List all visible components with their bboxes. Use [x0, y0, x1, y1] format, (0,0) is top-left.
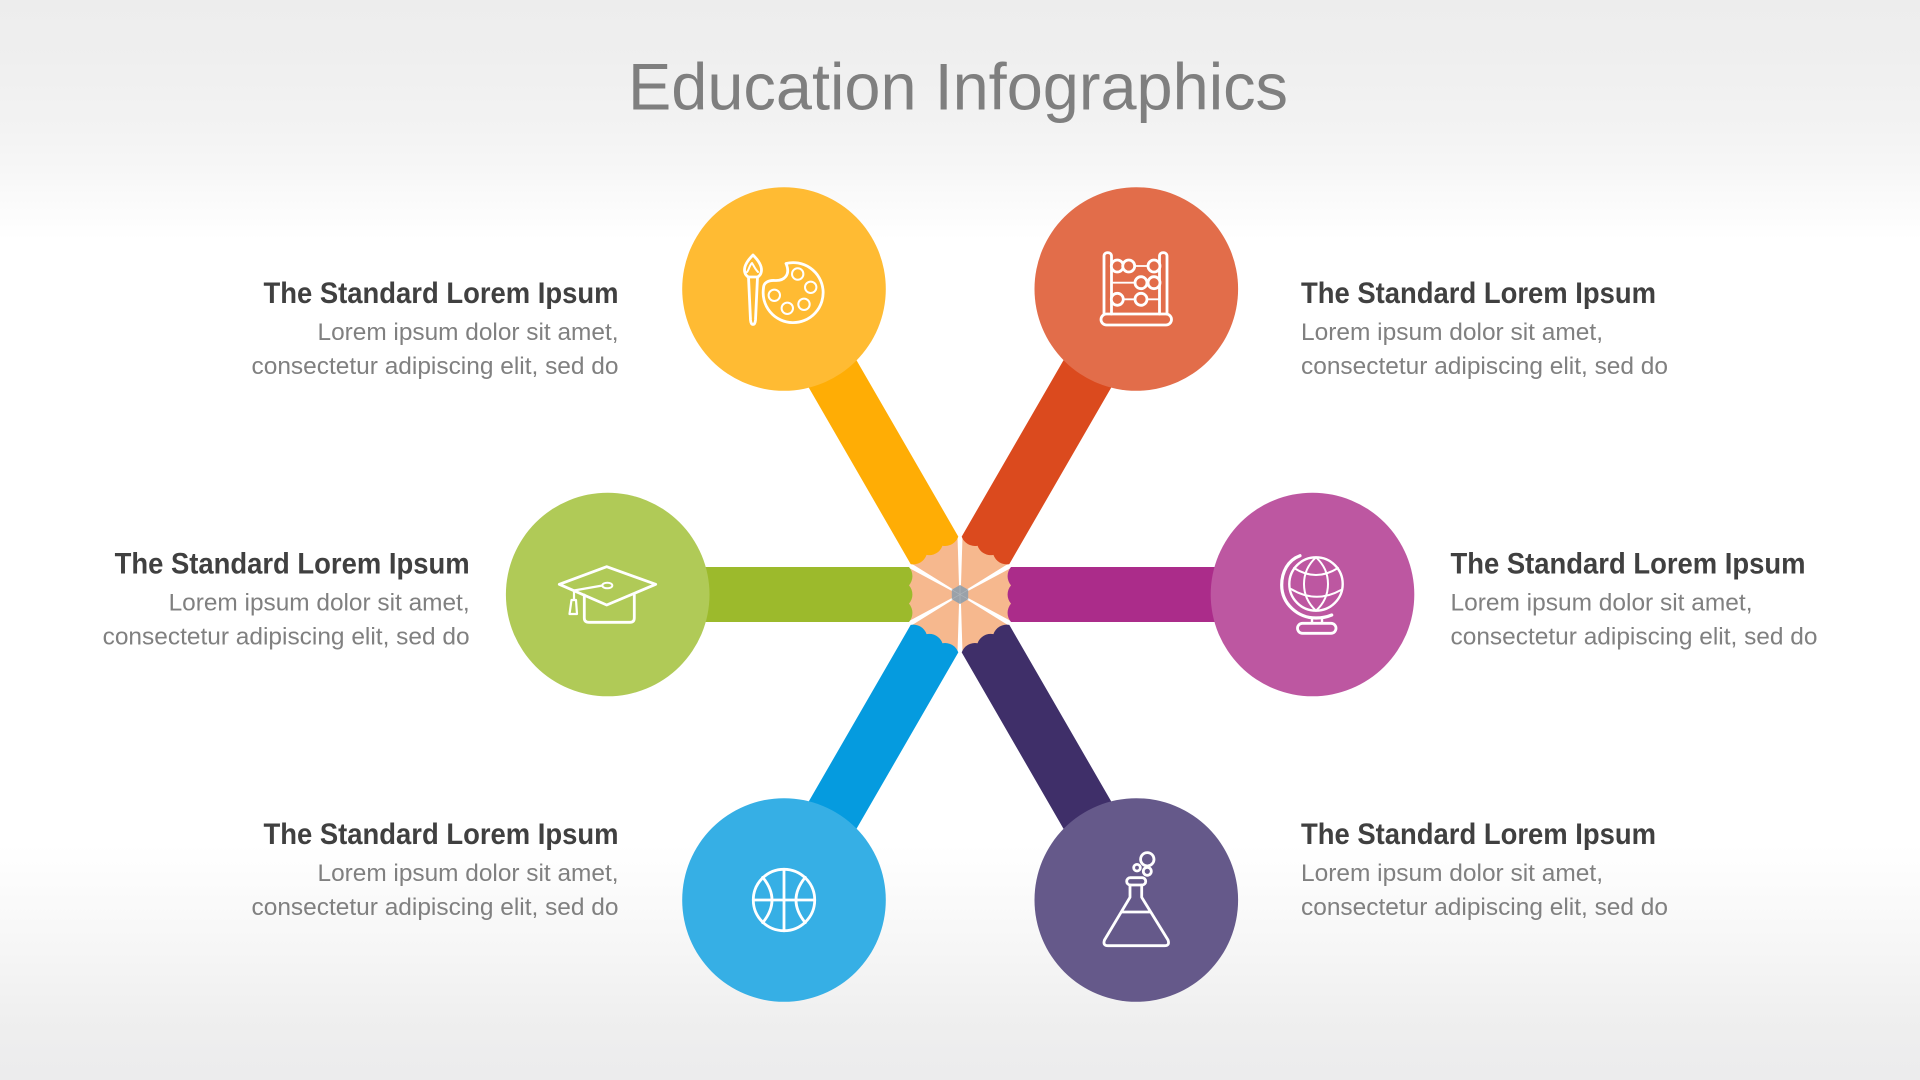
- text block: graduation: [103, 548, 470, 651]
- circle: magenta: [1211, 493, 1414, 696]
- circle: orange: [682, 187, 886, 391]
- panel: graduation (left): [103, 493, 912, 696]
- text block: science: The Standard Lorem Ipsum: [1301, 818, 1656, 851]
- text block: sport: [252, 818, 618, 921]
- icon: graduation cap: [559, 567, 656, 622]
- text block: graduation: The Standard Lorem Ipsum: [115, 548, 470, 581]
- pencil bar: navy: [960, 622, 1144, 885]
- text block: geography: The Standard Lorem Ipsum: [1450, 548, 1806, 581]
- circle: red: [1034, 187, 1238, 391]
- icon: brush and palette: [744, 255, 823, 324]
- panel: maths (top right): [960, 187, 1668, 567]
- central hub: pencil shavings: [903, 530, 1017, 658]
- text block: art: consectetur adipiscing elit, sed do: [252, 353, 618, 380]
- text block: science: consectetur adipiscing elit, sed do: [1301, 894, 1668, 921]
- text block: sport: consectetur adipiscing elit, sed do: [252, 894, 618, 921]
- text block: graduation: Lorem ipsum dolor sit amet,: [169, 590, 470, 617]
- panel: art (top left): [252, 187, 960, 567]
- pencil bar: red: [960, 304, 1144, 567]
- icon: basketball: [753, 869, 815, 931]
- text block: art: The Standard Lorem Ipsum: [264, 277, 618, 310]
- text block: science: [1301, 818, 1668, 921]
- panel: science (bottom right): [960, 622, 1668, 1002]
- pencil bar: green: [640, 567, 912, 622]
- text block: sport: The Standard Lorem Ipsum: [264, 818, 618, 851]
- text block: graduation: consectetur adipiscing elit, sed do: [103, 624, 470, 651]
- pencil bar: orange: [776, 304, 960, 567]
- pencil bar: blue: [776, 622, 960, 885]
- panel: sport (bottom left): [252, 622, 960, 1002]
- icon: abacus: [1101, 253, 1172, 325]
- icon: globe: [1282, 556, 1343, 633]
- pencil bar: magenta: [1008, 567, 1280, 622]
- text block: art: [252, 277, 618, 380]
- icon: flask: [1104, 853, 1169, 946]
- text block: maths: [1301, 277, 1668, 380]
- text block: art: Lorem ipsum dolor sit amet,: [318, 319, 618, 346]
- text block: maths: consectetur adipiscing elit, sed do: [1301, 353, 1668, 380]
- text block: sport: Lorem ipsum dolor sit amet,: [318, 860, 618, 887]
- circle: green: [506, 493, 710, 696]
- circle: purple: [1034, 798, 1238, 1002]
- text block: geography: Lorem ipsum dolor sit amet,: [1450, 590, 1752, 617]
- text block: maths: Lorem ipsum dolor sit amet,: [1301, 319, 1603, 346]
- text block: geography: [1450, 548, 1818, 651]
- circle: blue: [682, 798, 886, 1002]
- text block: maths: The Standard Lorem Ipsum: [1301, 277, 1656, 310]
- text block: geography: consectetur adipiscing elit, sed do: [1450, 624, 1818, 651]
- text block: science: Lorem ipsum dolor sit amet,: [1301, 860, 1603, 887]
- title: Education Infographics: [628, 50, 1288, 124]
- panel: geography (right): [1008, 493, 1818, 696]
